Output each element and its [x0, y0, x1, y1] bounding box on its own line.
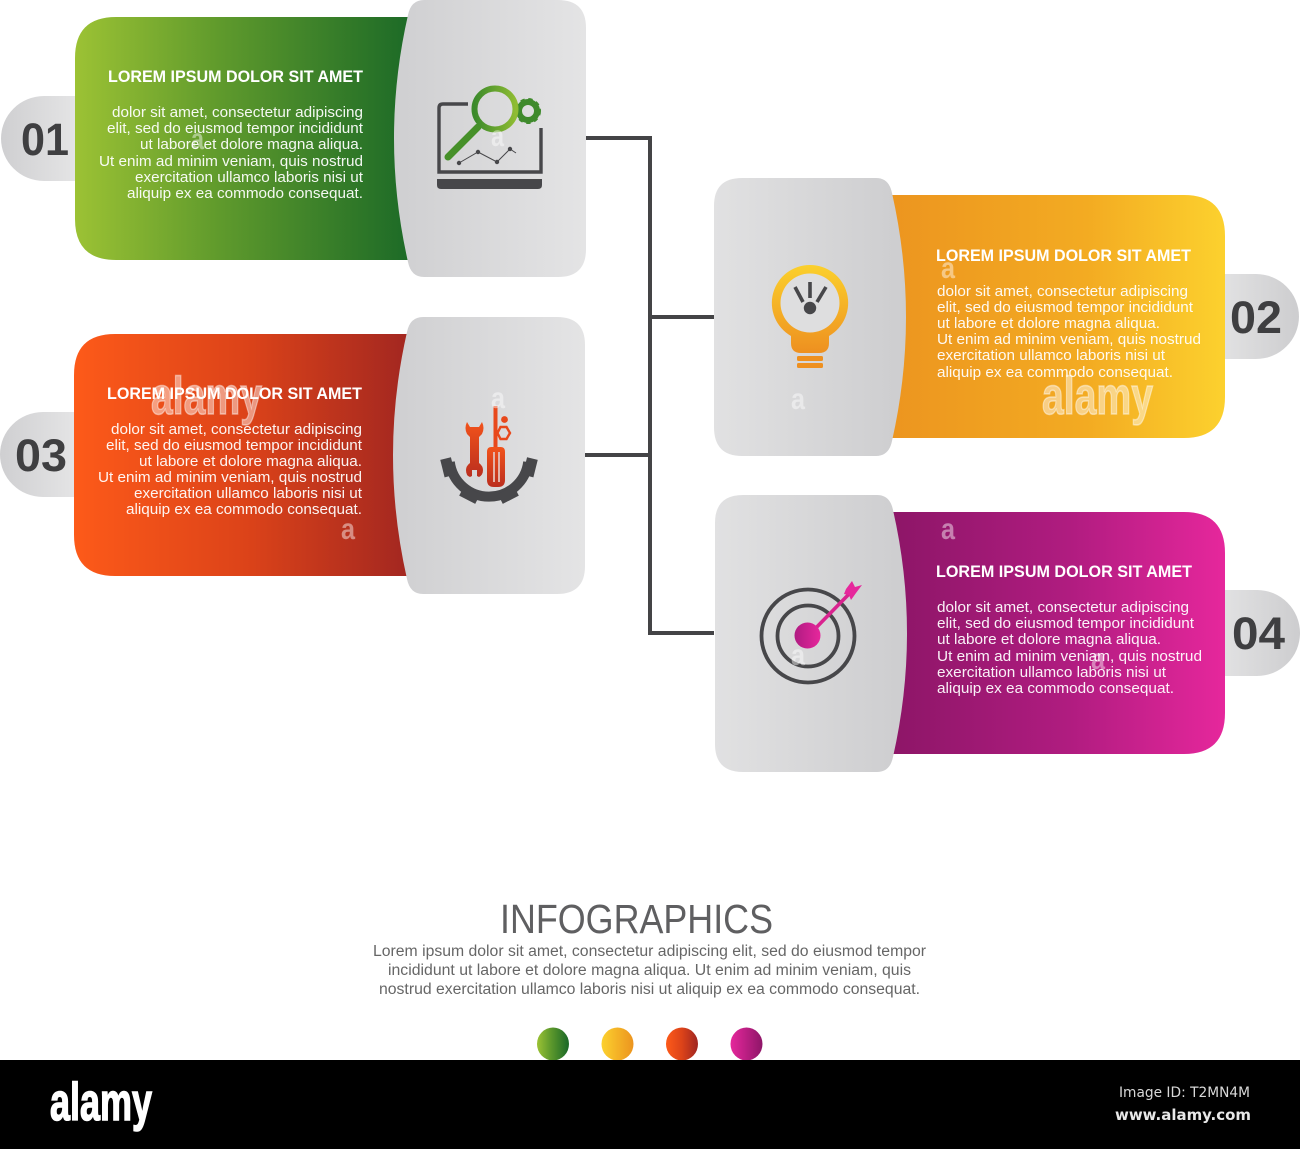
- body text 02: [937, 284, 1201, 381]
- body text 04: aliquip ex ea commodo consequat.: [937, 681, 1174, 697]
- green band: [75, 17, 420, 260]
- panel: step 04: [715, 495, 1300, 772]
- legend dots: [537, 1028, 762, 1060]
- body text 02: exercitation ullamco laboris nisi ut: [937, 348, 1165, 364]
- watermark: alamy left: alamy: [151, 367, 262, 426]
- body text 02: elit, sed do eiusmod tempor incididunt: [937, 300, 1193, 316]
- heading 03: LOREM IPSUM DOLOR SIT AMET: [107, 385, 362, 403]
- watermark: small a marks: a: [791, 383, 805, 416]
- grey card 02: [714, 178, 906, 456]
- number tab 03: [0, 412, 74, 497]
- body text 03: exercitation ullamco laboris nisi ut: [134, 486, 362, 502]
- grey card 01: [394, 0, 586, 277]
- purple band: [880, 512, 1225, 754]
- body text 03: dolor sit amet, consectetur adipiscing: [111, 422, 362, 438]
- body text 01: elit, sed do eiusmod tempor incididunt: [107, 121, 363, 137]
- watermark: small a marks: a: [941, 252, 955, 285]
- body text 03: Ut enim ad minim veniam, quis nostrud: [98, 470, 362, 486]
- number tab 01: [1, 96, 75, 181]
- body text 04: Ut enim ad minim veniam, quis nostrud: [937, 649, 1202, 665]
- number tab 01: 01: [21, 114, 69, 165]
- image id: Image ID: T2MN4M: [1119, 1085, 1250, 1101]
- body text 01: ut labore et dolore magna aliqua.: [140, 137, 363, 153]
- body text 03: aliquip ex ea commodo consequat.: [126, 502, 362, 518]
- icon: target with arrow: [762, 581, 862, 682]
- watermark: small a marks: a: [791, 639, 805, 672]
- website: www.alamy.com: [1115, 1106, 1251, 1124]
- icon: laptop with magnifier and gear: [437, 88, 542, 189]
- body text 01: [99, 105, 363, 202]
- watermark: alamy right: alamy: [1042, 367, 1153, 426]
- description text: nostrud exercitation ullamco laboris nisi ut aliquip ex ea commodo consequat.: [379, 981, 920, 998]
- body text 04: ut labore et dolore magna aliqua.: [937, 632, 1161, 648]
- footer logo: alamy: [50, 1073, 152, 1132]
- number tab 02: 02: [1230, 292, 1282, 343]
- heading 04: LOREM IPSUM DOLOR SIT AMET: [936, 563, 1192, 581]
- body text 02: Ut enim ad minim veniam, quis nostrud: [937, 332, 1201, 348]
- watermark: small a marks: a: [941, 513, 955, 546]
- panel: step 01: [1, 0, 586, 277]
- body text 01: Ut enim ad minim veniam, quis nostrud: [99, 154, 363, 170]
- watermark: small a marks: a: [491, 120, 504, 153]
- watermark: small a marks: a: [191, 123, 204, 156]
- body text 03: ut labore et dolore magna aliqua.: [139, 454, 362, 470]
- heading 01: LOREM IPSUM DOLOR SIT AMET: [108, 68, 363, 86]
- heading 02: LOREM IPSUM DOLOR SIT AMET: [936, 247, 1191, 265]
- body text 01: aliquip ex ea commodo consequat.: [127, 186, 363, 202]
- body text 02: ut labore et dolore magna aliqua.: [937, 316, 1160, 332]
- body text 03: elit, sed do eiusmod tempor incididunt: [106, 438, 362, 454]
- number tab 04: [1225, 590, 1300, 676]
- title: INFOGRAPHICS: [500, 896, 773, 942]
- watermark: small a marks: a: [491, 382, 505, 415]
- number tab 04: 04: [1232, 608, 1285, 659]
- number tab 02: [1225, 274, 1299, 359]
- description text: Lorem ipsum dolor sit amet, consectetur adipiscing elit, sed do eiusmod tempor: [373, 943, 926, 960]
- red band: [74, 334, 419, 576]
- orange band: [880, 195, 1225, 438]
- panel: step 03: [0, 317, 585, 594]
- description text: incididunt ut labore et dolore magna aliqua. Ut enim ad minim veniam, quis: [388, 962, 911, 979]
- connector lines: [585, 138, 714, 633]
- body text 04: dolor sit amet, consectetur adipiscing: [937, 600, 1189, 616]
- description text: [373, 943, 926, 998]
- watermark: small a marks: a: [1091, 643, 1105, 676]
- panel: step 02: [714, 178, 1299, 456]
- grey card 04: [715, 495, 907, 772]
- body text 04: elit, sed do eiusmod tempor incididunt: [937, 616, 1194, 632]
- body text 04: exercitation ullamco laboris nisi ut: [937, 665, 1166, 681]
- body text 01: exercitation ullamco laboris nisi ut: [135, 170, 363, 186]
- grey card 03: [393, 317, 585, 594]
- number tab 03: 03: [15, 430, 67, 481]
- black footer bar: [0, 1060, 1300, 1149]
- icon: tools and gear: [440, 406, 538, 504]
- watermark: small a marks: [191, 120, 1105, 676]
- watermark: small a marks: a: [341, 513, 355, 546]
- body text 01: dolor sit amet, consectetur adipiscing: [112, 105, 363, 121]
- body text 02: dolor sit amet, consectetur adipiscing: [937, 284, 1188, 300]
- body text 04: [937, 600, 1202, 697]
- icon: light bulb: [772, 265, 848, 368]
- body text 02: aliquip ex ea commodo consequat.: [937, 365, 1173, 381]
- body text 03: [98, 422, 362, 518]
